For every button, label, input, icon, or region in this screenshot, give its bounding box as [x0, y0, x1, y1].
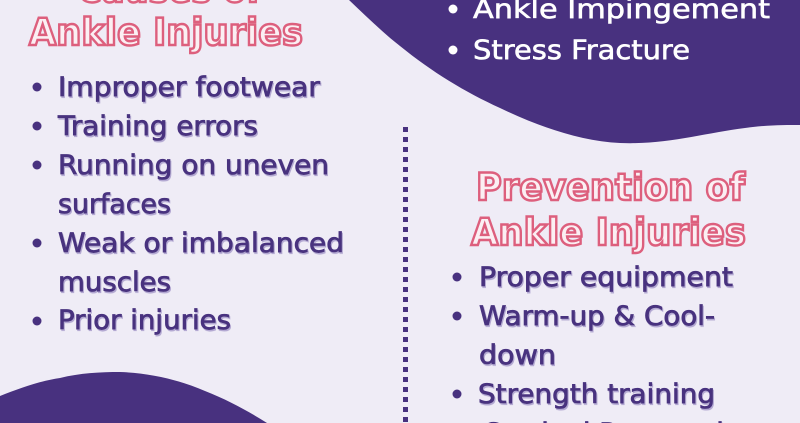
- list: causes of ankle injuries: surfaces: [58, 189, 171, 220]
- list: causes of ankle injuries: Prior injuries: [58, 305, 231, 336]
- list: types of ankle injuries: Stress Fracture: [473, 35, 690, 66]
- list: causes of ankle injuries: Training errors: [57, 111, 258, 142]
- heading: causes of ankle injuries: Ankle Injuries: [29, 11, 303, 54]
- heading: prevention of ankle injuries: Ankle Injuries: [471, 211, 746, 254]
- list: causes of ankle injuries: Running on uneven: [58, 150, 329, 181]
- list: prevention of ankle injuries: Warm-up & Cool-: [479, 301, 715, 332]
- heading: prevention of ankle injuries: Prevention of: [476, 166, 746, 209]
- heading: prevention of ankle injuries: [471, 166, 746, 254]
- list: causes of ankle injuries: Weak or imbalanced: [58, 228, 344, 259]
- list: prevention of ankle injuries: down: [479, 340, 556, 371]
- list: prevention of ankle injuries: Proper equipment: [479, 262, 733, 293]
- list: types of ankle injuries: [448, 0, 770, 66]
- list: causes of ankle injuries: muscles: [58, 267, 171, 298]
- list: prevention of ankle injuries: [452, 262, 758, 423]
- top right purple wave shape: [349, 0, 800, 143]
- list: prevention of ankle injuries: Strength training: [478, 379, 715, 410]
- list: causes of ankle injuries: Improper footwear: [58, 72, 321, 103]
- list: causes of ankle injuries: [32, 72, 344, 336]
- bottom left purple wave shape: [0, 372, 267, 423]
- dotted vertical divider: [403, 127, 408, 423]
